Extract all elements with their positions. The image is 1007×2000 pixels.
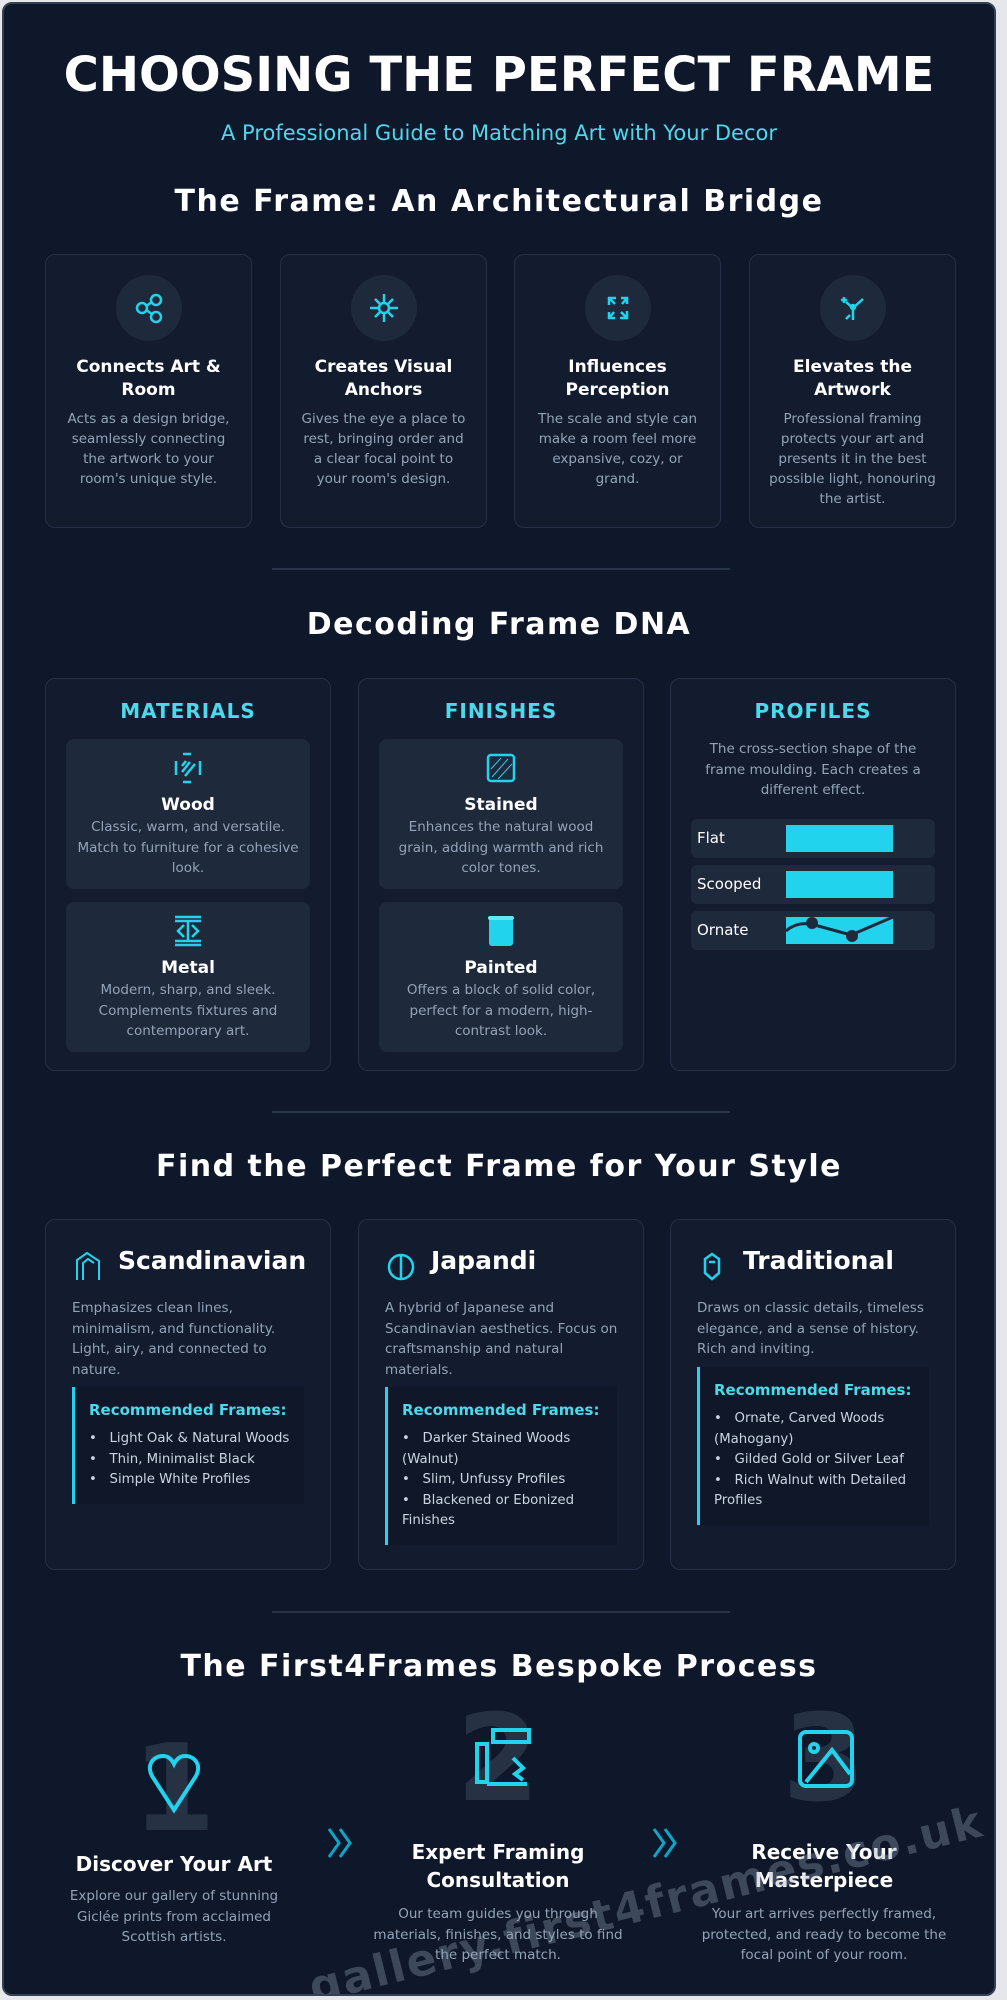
icon: circle line <box>388 1254 414 1280</box>
card: scandinavian: Emphasizes clean lines, minimalism, and functionality. Light, airy, and connected to nature. <box>72 1300 275 1378</box>
card: traditional: Recommended Frames: <box>714 1381 911 1399</box>
subcard: stained: Enhances the natural wood grain, adding warmth and rich color tones. <box>399 819 603 876</box>
panel: finishes <box>358 678 644 1071</box>
icon: ornament <box>704 1252 720 1280</box>
arrow 2 <box>652 1828 677 1858</box>
step 1: Discover Your Art <box>76 1852 272 1876</box>
card: elevates: Artwork <box>814 380 891 400</box>
card: japandi: A hybrid of Japanese and Scandinavian aesthetics. Focus on craftsmanship and natural materials. <box>385 1300 617 1378</box>
profile: flat <box>691 819 935 858</box>
profile: scooped <box>691 865 935 904</box>
heading: style: Find the Perfect Frame for Your Style <box>156 1149 842 1184</box>
card: japandi: Recommended Frames: <box>402 1401 599 1419</box>
card: traditional <box>670 1219 956 1570</box>
icon: picture <box>798 1730 854 1788</box>
panel: materials: MATERIALS <box>120 699 256 723</box>
card: anchors: Creates Visual <box>315 357 452 377</box>
card: scandinavian: • Simple White Profiles <box>89 1472 250 1487</box>
subcard: painted: Painted <box>464 958 538 978</box>
step 2: Our team guides you through materials, finishes, and styles to find the perfect match. <box>373 1906 623 1963</box>
card: perception: The scale and style can make a room feel more expansive, cozy, or grand. <box>538 411 697 487</box>
subcard: metal <box>66 902 310 1052</box>
step 2: Consultation <box>426 1868 570 1892</box>
step 2: 2 <box>456 1690 540 1829</box>
profile: ornate <box>691 911 935 950</box>
heading: process: The First4Frames Bespoke Process <box>180 1649 818 1684</box>
card: scandinavian: Recommended Frames: <box>89 1401 286 1419</box>
step 1: 1 <box>132 1720 216 1859</box>
subcard: metal: Modern, sharp, and sleek. Complements fixtures and contemporary art. <box>99 982 277 1039</box>
panel: finishes: FINISHES <box>445 699 557 723</box>
card: traditional: Traditional <box>743 1246 894 1275</box>
step 1 <box>70 1720 278 1945</box>
card: perception <box>514 254 721 528</box>
arrow 1 <box>328 1828 352 1858</box>
card: connects: Acts as a design bridge, seamlessly connecting the artwork to your room's unique style. <box>68 411 229 487</box>
panel: profiles <box>670 678 956 1071</box>
panel: profiles: PROFILES <box>754 699 871 723</box>
profile: flat: Flat <box>697 829 725 847</box>
step 1: Explore our gallery of stunning Giclée prints from acclaimed Scottish artists. <box>70 1888 278 1945</box>
icon: house <box>76 1252 100 1280</box>
card: perception: Perception <box>566 380 669 400</box>
step 2 <box>373 1690 623 1963</box>
card: anchors: Anchors <box>345 380 422 400</box>
card: perception: Influences <box>568 357 667 377</box>
card: elevates: Professional framing protects your art and presents it in the best possible light, honouring the artist. <box>769 411 936 507</box>
icon: arrows <box>585 275 651 341</box>
subtitle: A Professional Guide to Matching Art with Your Decor <box>221 121 777 145</box>
card: connects: Connects Art & <box>76 357 221 377</box>
card: connects: Room <box>121 380 176 400</box>
card: scandinavian <box>45 1219 331 1570</box>
step 3: Masterpiece <box>755 1868 893 1892</box>
card: scandinavian: Scandinavian <box>118 1246 306 1275</box>
card: connects <box>45 254 252 528</box>
icon: elevate <box>820 275 886 341</box>
subcard: metal: Metal <box>161 958 215 978</box>
card: japandi <box>358 1219 644 1570</box>
card: traditional: Draws on classic details, timeless elegance, and a sense of history. Rich and inviting. <box>697 1300 924 1357</box>
subcard: wood: Classic, warm, and versatile. Match to furniture for a cohesive look. <box>78 819 298 876</box>
panel: profiles: The cross-section shape of the frame moulding. Each creates a different effect. <box>705 741 921 798</box>
step 3: Your art arrives perfectly framed, protected, and ready to become the focal point of your room. <box>702 1906 946 1963</box>
card: elevates <box>749 254 956 528</box>
profile: ornate: Ornate <box>697 921 749 939</box>
card: elevates: Elevates the <box>793 357 912 377</box>
card: japandi: • Blackened or Ebonized Finishes <box>402 1492 574 1528</box>
card: japandi: Japandi <box>431 1246 536 1275</box>
card: scandinavian: • Thin, Minimalist Black <box>89 1452 255 1466</box>
step 3: Receive Your <box>751 1840 897 1864</box>
icon: frame tools <box>475 1728 531 1786</box>
card: anchors: Gives the eye a place to rest, bringing order and a clear focal point to your room's design. <box>302 411 465 487</box>
step 3 <box>702 1690 946 1963</box>
title: CHOOSING THE PERFECT FRAME <box>64 47 934 103</box>
panel: materials <box>45 678 331 1071</box>
icon: heart <box>148 1754 200 1814</box>
card: traditional: • Gilded Gold or Silver Leaf <box>714 1452 904 1467</box>
card: traditional: • Ornate, Carved Woods (Mahogany) <box>714 1411 884 1446</box>
subcard: wood: Wood <box>161 795 215 815</box>
subcard: painted: Offers a block of solid color, perfect for a modern, high-contrast look. <box>407 982 595 1039</box>
card: japandi: • Slim, Unfussy Profiles <box>402 1472 565 1487</box>
heading: architectural bridge: The Frame: An Architectural Bridge <box>175 184 823 219</box>
subcard: stained: Stained <box>464 795 538 815</box>
profile: scooped: Scooped <box>697 875 761 893</box>
icon: share <box>116 275 182 341</box>
card: traditional: • Rich Walnut with Detailed Profiles <box>714 1472 906 1508</box>
card: anchors <box>280 254 487 528</box>
step 3: 3 <box>782 1690 866 1829</box>
card: japandi: • Darker Stained Woods (Walnut) <box>402 1431 570 1466</box>
step 2: Expert Framing <box>412 1840 584 1864</box>
subcard: painted <box>379 902 623 1052</box>
heading: frame DNA: Decoding Frame DNA <box>307 607 691 642</box>
card: scandinavian: • Light Oak & Natural Woods <box>89 1431 289 1446</box>
subcard: stained <box>379 739 623 889</box>
subcard: wood <box>66 739 310 889</box>
icon: anchor sun <box>351 275 417 341</box>
